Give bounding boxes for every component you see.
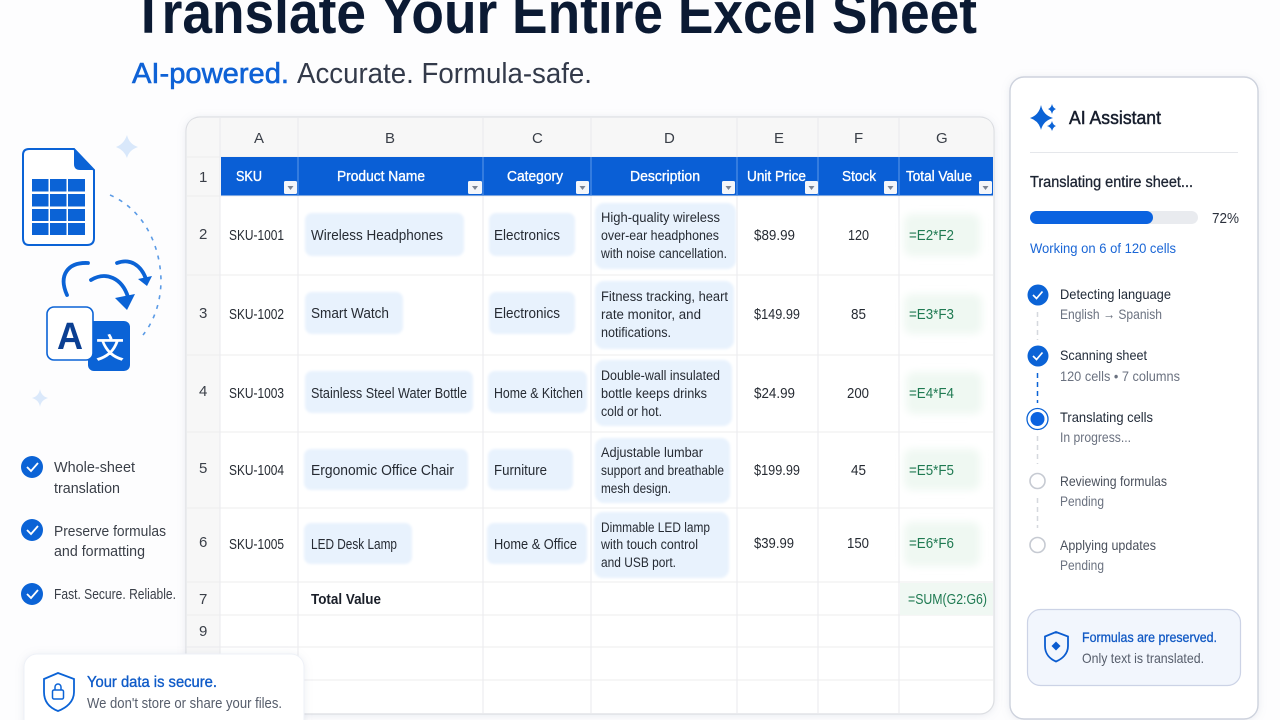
row number column: 5 [199,460,207,477]
row number column [187,157,220,713]
step: translating cells: In progress... [1060,429,1131,445]
row number column: 2 [199,226,207,243]
header band: Category [507,169,564,185]
row number column: 4 [199,383,207,400]
callout: formulas preserved: Formulas are preserved. [1082,629,1217,645]
filter buttons [284,181,992,194]
row 5: mesh design. [601,481,671,496]
row 5: Furniture [494,463,547,479]
row 2: Wireless Headphones [311,228,443,244]
step: detecting language: Detecting language [1060,286,1171,302]
step: reviewing formulas: Reviewing formulas [1060,473,1167,489]
row 6: Home & Office [494,537,577,553]
row 3: =E3*F3 [909,307,954,323]
step: reviewing formulas [1030,473,1167,509]
row 7 totals [311,583,993,615]
row 6 [229,512,980,578]
row 4: Stainless Steel Water Bottle [311,386,467,402]
row 6: LED Desk Lamp [311,537,397,553]
feature: whole-sheet translation: Whole-sheet [54,459,136,476]
row 6: $39.99 [754,536,794,552]
feature: whole-sheet translation [21,456,136,497]
row 3: $149.99 [754,307,800,323]
progress section: 72% [1212,210,1239,227]
row 7 totals: =SUM(G2:G6) [908,592,987,608]
icon: lock shield [44,673,74,711]
header band: Product Name [337,169,425,185]
icon: sparkle large [116,135,138,158]
header band: Description [630,169,700,185]
column header row [187,118,993,157]
feature: fast secure reliable [21,583,176,605]
subtitle: AI-powered. [132,58,289,90]
callout: formulas preserved [1028,610,1240,686]
row 6: with touch control [600,537,698,552]
progress section: Working on 6 of 120 cells [1030,240,1176,256]
row 4: 200 [847,386,869,402]
row 4: SKU-1003 [229,386,284,402]
column header row: E [774,130,784,147]
header band: SKU [236,169,262,185]
row number column: 9 [199,623,207,640]
row 4: Home & Kitchen [494,386,583,402]
row 6: and USB port. [601,555,676,570]
row 6: =E6*F6 [909,536,954,552]
row 5: support and breathable [601,463,724,478]
step: applying updates: Applying updates [1060,537,1156,553]
step: reviewing formulas: Pending [1060,493,1104,509]
step: scanning sheet [1028,346,1180,384]
feature: preserve formulas: and formatting [54,543,145,560]
step connectors [1036,312,1038,528]
card: data security: We don't store or share your files. [87,696,282,712]
row 6: SKU-1005 [229,537,284,553]
icon: language badges: A [57,316,83,358]
row 2: SKU-1001 [229,228,284,244]
row 3 [229,281,982,349]
card: data security [24,654,304,720]
feature: whole-sheet translation: translation [54,480,120,497]
row 4 [229,360,982,426]
feature: fast secure reliable: Fast. Secure. Reliable. [54,586,176,603]
card: data security: Your data is secure. [87,674,217,691]
panel: AI assistant [1010,77,1258,719]
row 3: notifications. [601,325,671,340]
row 5: SKU-1004 [229,463,284,479]
row 4: bottle keeps drinks [601,386,707,401]
subtitle: Accurate. Formula-safe. [297,58,592,90]
icon: spreadsheet file [23,149,94,245]
feature: preserve formulas [21,519,166,560]
row 5: $199.99 [754,463,800,479]
feature: preserve formulas: Preserve formulas [54,523,166,540]
row number column: 1 [199,169,207,186]
column header row: C [532,130,543,147]
row 2 [229,203,980,269]
row 3: Electronics [494,306,560,322]
row 5 [229,438,980,503]
column header row: D [664,130,675,147]
step: applying updates: Pending [1060,557,1104,573]
icon: shield [1045,632,1068,662]
step: scanning sheet: 120 cells • 7 columns [1060,368,1180,384]
row 2: over-ear headphones [601,228,719,243]
column header row: F [854,130,863,147]
row 2: =E2*F2 [909,228,954,244]
header band: Unit Price [747,169,806,185]
row 2: High-quality wireless [601,210,720,225]
row number column: 6 [199,534,207,551]
row 6: 150 [847,536,869,552]
subtitle [132,58,592,90]
progress section [1030,174,1239,256]
icon: translate arrows [64,261,152,310]
row 4: Double-wall insulated [601,368,720,383]
feature list [21,456,176,605]
row 2: $89.99 [754,228,795,244]
icon: language badges: 文 [96,333,124,364]
row 6: Dimmable LED lamp [601,520,710,535]
step: scanning sheet: Scanning sheet [1060,347,1147,363]
row 2: Electronics [494,228,560,244]
row 4: $24.99 [754,386,795,402]
row 4: cold or hot. [601,404,662,419]
row number column: 7 [199,591,207,608]
step: detecting language [1028,284,1171,322]
row 7 totals: Total Value [311,592,381,608]
row 5: Ergonomic Office Chair [311,463,454,479]
row 5: 45 [851,463,866,479]
arrow: dashed arc [110,195,161,335]
row 2: 120 [848,228,869,244]
row 5: =E5*F5 [909,463,954,479]
step: applying updates [1030,537,1156,573]
step: detecting language: English → Spanish [1060,306,1162,322]
row 3: SKU-1002 [229,307,284,323]
header band [221,157,993,196]
progress section: Translating entire sheet... [1030,174,1193,191]
header band: Stock [842,169,877,185]
icon: sparkle small [32,389,48,407]
column header row: G [936,130,948,147]
callout: formulas preserved: Only text is translated. [1082,650,1204,666]
row 4: =E4*F4 [909,386,954,402]
spreadsheet table [186,117,994,714]
row 3: 85 [851,307,866,323]
column header row: B [385,130,395,147]
step: translating cells: Translating cells [1060,409,1153,425]
step: translating cells [1027,408,1153,445]
row number column: 3 [199,305,207,322]
row 5: Adjustable lumbar [601,445,703,460]
row 3: rate monitor, and [601,307,701,322]
row 3: Fitness tracking, heart [601,289,728,304]
icon: sparkles [1030,104,1056,131]
column header row: A [254,130,264,147]
row 3: Smart Watch [311,306,389,322]
panel heading: AI Assistant [1069,108,1161,128]
icon: language badges [47,307,130,371]
row 2: with noise cancellation. [600,246,727,261]
header band: Total Value [906,169,972,185]
